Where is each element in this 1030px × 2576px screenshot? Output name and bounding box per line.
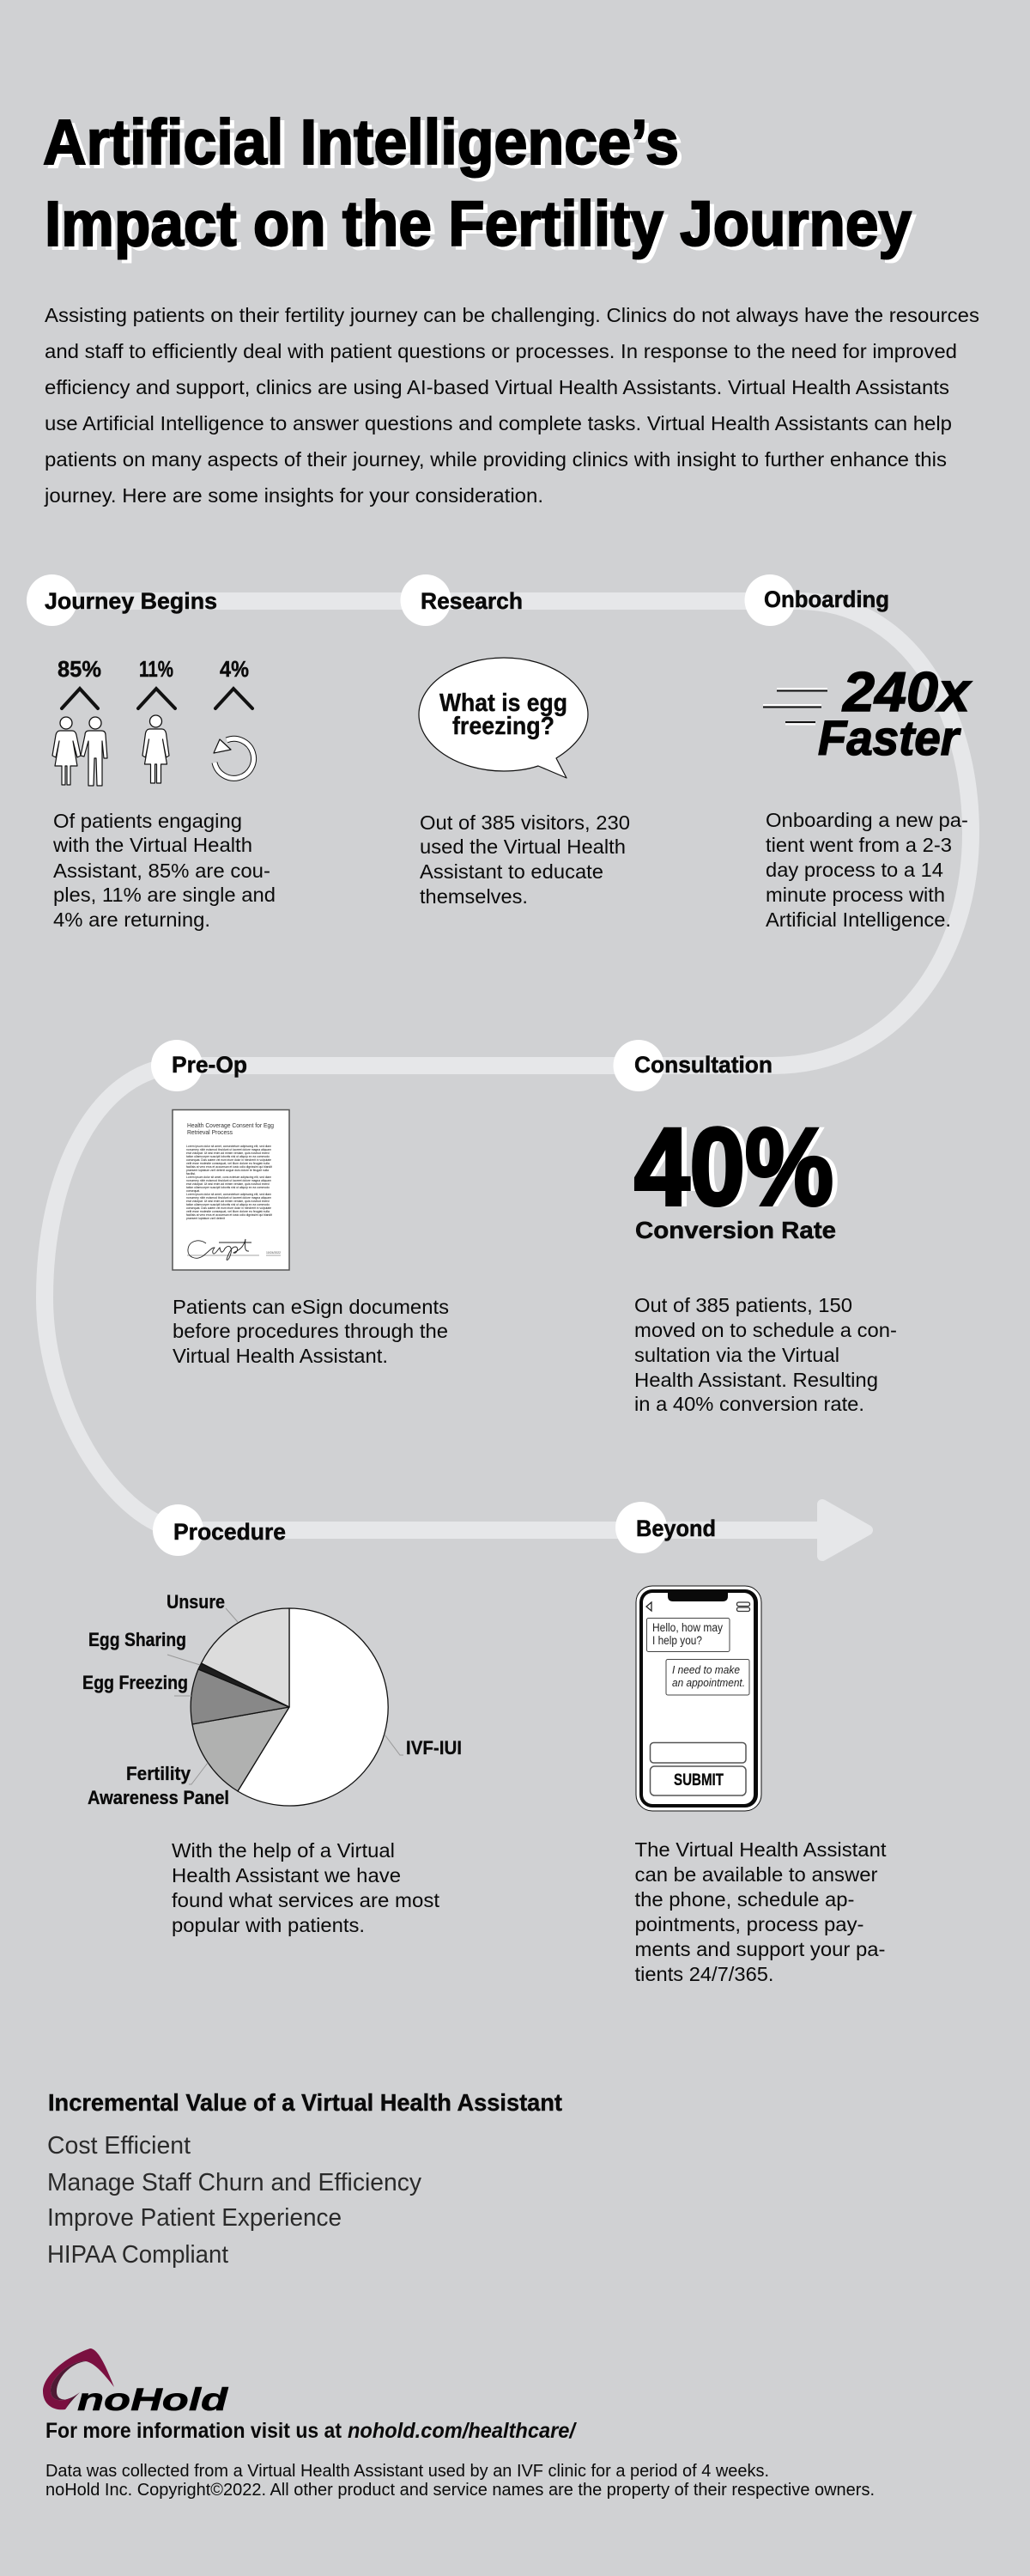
consent document: consequat. Duis autem vel eum iriure dolor in hendrerit in vulputate [186, 1206, 271, 1210]
description: popular with patients. [172, 1914, 365, 1936]
title: Impact on the Fertility Journey [49, 191, 916, 263]
call to action: nohold.com/healthcare/ [348, 2419, 578, 2443]
intro paragraph [44, 304, 979, 507]
intro paragraph: patients on many aspects of their journey, while providing clinics with insight to further enhance this [45, 448, 947, 471]
stat: 4% returning: 4% [220, 656, 249, 682]
intro paragraph: use Artificial Intelligence to answer questions and complete tasks. Virtual Health Assistants can help [45, 412, 952, 434]
description: 4% are returning. [53, 908, 210, 931]
description: tients 24/7/365. [635, 1963, 774, 1985]
description [635, 1838, 887, 1985]
logo: noHold: noHold [77, 2382, 229, 2417]
heading: Beyond [636, 1516, 716, 1541]
phone mockup: Hello, how may [652, 1621, 723, 1634]
pie labels: IVF-IUI [406, 1737, 462, 1759]
description: used the Virtual Health [420, 835, 626, 858]
pie labels: Egg Freezing [82, 1672, 188, 1693]
stat: 240x faster: Faster [818, 711, 961, 766]
description: sultation via the Virtual [634, 1344, 839, 1366]
heading: Onboarding [764, 586, 889, 612]
stat: 240x faster: 240x [841, 660, 972, 723]
speed lines [763, 689, 827, 725]
description: minute process with [766, 884, 945, 906]
title [43, 106, 916, 263]
description: Patients can eSign documents [173, 1296, 449, 1318]
intro paragraph: and staff to efficiently deal with patient questions or processes. In response to the need for improved [45, 340, 957, 362]
description: day process to a 14 [766, 859, 943, 881]
panel: beyond [615, 1502, 887, 1985]
description: ples, 11% are single and [53, 884, 276, 906]
value list: Manage Staff Churn and Efficiency [47, 2169, 421, 2196]
journey path band [45, 601, 971, 1530]
pie labels: Awareness Panel [88, 1787, 229, 1808]
stat: 240x faster [818, 660, 972, 766]
consent document: facilisis at vero eros et accumsan et iusto odio dignissim qui blandit [186, 1213, 273, 1217]
description: Artificial Intelligence. [766, 908, 951, 931]
footnote: noHold Inc. Copyright©2022. All other product and service names are the property of their respective owners. [45, 2481, 875, 2500]
description: Of patients engaging [53, 810, 242, 832]
consent document: consequat. [186, 1189, 200, 1193]
description: found what services are most [172, 1889, 439, 1911]
consent document: Health Coverage Consent for Egg [187, 1123, 274, 1129]
speech bubble: What is egg [439, 690, 567, 717]
description: moved on to schedule a con- [634, 1319, 897, 1341]
stat: 4% returning [214, 656, 254, 778]
description: themselves. [420, 885, 528, 908]
value list: HIPAA Compliant [47, 2241, 228, 2269]
description [420, 811, 630, 908]
description: the phone, schedule ap- [635, 1888, 855, 1911]
consent document: Lorem ipsum dolor sit amet, consectetuer adipiscing elit, sed diam [186, 1145, 271, 1148]
stat: 85% couples: 85% [58, 656, 101, 682]
phone mockup: I need to make [672, 1663, 740, 1676]
logo: noHold [43, 2348, 229, 2417]
panel: research [400, 574, 630, 908]
panel: onboarding [745, 574, 972, 931]
consent document: erat volutpat. Ut wisi enim ad minim veniam, quis nostrud exerci [186, 1151, 270, 1155]
consent document: consequat. Duis autem vel eum iriure dolor in hendrerit in vulputate [186, 1158, 271, 1162]
consent document: nonummy nibh euismod tincidunt ut laoreet dolore magna aliquam [186, 1196, 271, 1200]
title: Artificial Intelligence’s [47, 110, 683, 181]
description: tient went from a 2-3 [766, 834, 952, 856]
node circle [400, 574, 451, 626]
stat label: Conversion Rate [635, 1217, 836, 1243]
description: pointments, process pay- [635, 1913, 863, 1935]
description: Out of 385 patients, 150 [634, 1294, 852, 1316]
description: The Virtual Health Assistant [635, 1838, 887, 1861]
phone mockup: an appointment. [672, 1676, 745, 1689]
footnote [45, 2462, 875, 2500]
pie labels: Fertility [126, 1763, 191, 1784]
description: ments and support your pa- [635, 1938, 886, 1960]
consent document: tation ullamcorper suscipit lobortis nisl ut aliquip ex ea commodo [186, 1155, 270, 1158]
description: Assistant to educate [420, 860, 603, 883]
consent document: nonummy nibh euismod tincidunt ut laoreet dolore magna aliquam [186, 1148, 271, 1151]
node circle [615, 1502, 667, 1553]
panel: consultation [613, 1040, 897, 1415]
pie leader lines [167, 1608, 403, 1784]
value list: Cost Efficient [47, 2132, 191, 2160]
consent document: facilisi. [186, 1172, 196, 1176]
panel: procedure [82, 1504, 462, 1936]
intro paragraph: journey. Here are some insights for your consideration. [44, 484, 543, 507]
consent document: praesent luptatum zzril delenit augue duis dolore te feugait nulla [186, 1169, 270, 1172]
description: Out of 385 visitors, 230 [420, 811, 630, 834]
description: in a 40% conversion rate. [634, 1393, 864, 1415]
description [172, 1839, 439, 1936]
call to action: For more information visit us at [45, 2419, 342, 2443]
node circle [613, 1040, 664, 1091]
speech bubble [419, 658, 588, 778]
phone mockup: I help you? [652, 1634, 702, 1647]
pie labels: Unsure [167, 1591, 225, 1613]
title: Artificial Intelligence’s [43, 106, 679, 178]
description [766, 809, 968, 931]
description: Health Assistant we have [172, 1864, 401, 1886]
phone mockup [636, 1586, 761, 1811]
node circle [27, 574, 77, 626]
description: Virtual Health Assistant. [173, 1345, 388, 1367]
description: Onboarding a new pa- [766, 809, 968, 831]
phone mockup: SUBMIT [674, 1771, 724, 1789]
description [173, 1296, 449, 1367]
stat: 11% single [138, 656, 175, 783]
title: Impact on the Fertility Journey [45, 188, 912, 259]
consent document: praesent luptatum zzril delenit [186, 1217, 226, 1220]
stat: 40%: 40% [639, 1106, 839, 1229]
value list [47, 2132, 421, 2269]
value list: Improve Patient Experience [47, 2204, 342, 2232]
node circle [745, 574, 795, 626]
consent document: velit esse molestie consequat, vel illum dolore eu feugiat nulla [186, 1210, 270, 1213]
description: Health Assistant. Resulting [634, 1369, 878, 1391]
heading: Research [421, 588, 523, 614]
node circle [151, 1040, 203, 1091]
intro paragraph: Assisting patients on their fertility journey can be challenging. Clinics do not always have the resources [45, 304, 979, 326]
panel: incremental value [47, 2089, 562, 2269]
consent document: erat volutpat. Ut wisi enim ad minim veniam, quis nostrud exerci [186, 1200, 270, 1203]
consent document: nonummy nibh euismod tincidunt ut laoreet dolore magna aliquam [186, 1179, 271, 1182]
node circle [153, 1504, 203, 1556]
description [634, 1294, 897, 1415]
description: can be available to answer [635, 1863, 878, 1886]
panel: journey begins [27, 574, 276, 931]
arrow head [822, 1504, 868, 1556]
heading: Journey Begins [45, 588, 217, 614]
heading: Consultation [634, 1052, 772, 1078]
stat: 11% single: 11% [139, 656, 173, 682]
intro paragraph: efficiency and support, clinics are using AI-based Virtual Health Assistants. Virtual Health Assistants [45, 376, 949, 398]
consent document: Lorem ipsum dolor sit amet, cons ectetuer adipiscing elit, sed diam [186, 1176, 271, 1179]
pie labels: Egg Sharing [88, 1629, 186, 1650]
consent document: velit esse molestie consequat, vel illum dolore eu feugiat nulla [186, 1162, 270, 1165]
description: before procedures through the [173, 1320, 448, 1342]
consent document: erat volutpat. Ut wisi enim ad minim veniam, quis nostrud exerci [186, 1182, 270, 1186]
stat: 85% couples [52, 656, 107, 786]
description: With the help of a Virtual [172, 1839, 395, 1862]
consent document: facilisis at vero eros et accumsan et iusto odio dignissim qui blandit [186, 1165, 273, 1169]
heading: Procedure [173, 1519, 286, 1545]
consent document: tation ullamcorper suscipit lobortis nisl ut aliquip ex ea commodo [186, 1203, 270, 1206]
pie labels [82, 1591, 462, 1808]
call to action [45, 2419, 578, 2443]
stat: 40%: 40% [634, 1106, 833, 1229]
description: Assistant, 85% are cou- [53, 860, 270, 882]
description [52, 810, 276, 931]
consent document: 10/24/2022 [266, 1250, 282, 1255]
pie chart [191, 1608, 388, 1806]
description: with the Virtual Health [52, 834, 252, 856]
consent document: Retrieval Process [187, 1130, 233, 1136]
consent document: tation ullamcorper suscipit lobortis nisl ut aliquip ex ea commodo [186, 1186, 270, 1189]
footnote: Data was collected from a Virtual Health Assistant used by an IVF clinic for a period of 4 weeks. [45, 2462, 769, 2481]
heading: Incremental Value of a Virtual Health Assistant [48, 2089, 562, 2116]
heading: Pre-Op [172, 1052, 247, 1078]
consent document [173, 1109, 289, 1270]
speech bubble: freezing? [452, 713, 554, 740]
consent document: Lorem ipsum dolor sit amet, consectetuer adipiscing elit, sed diam [186, 1193, 271, 1196]
panel: pre-op [151, 1040, 449, 1367]
